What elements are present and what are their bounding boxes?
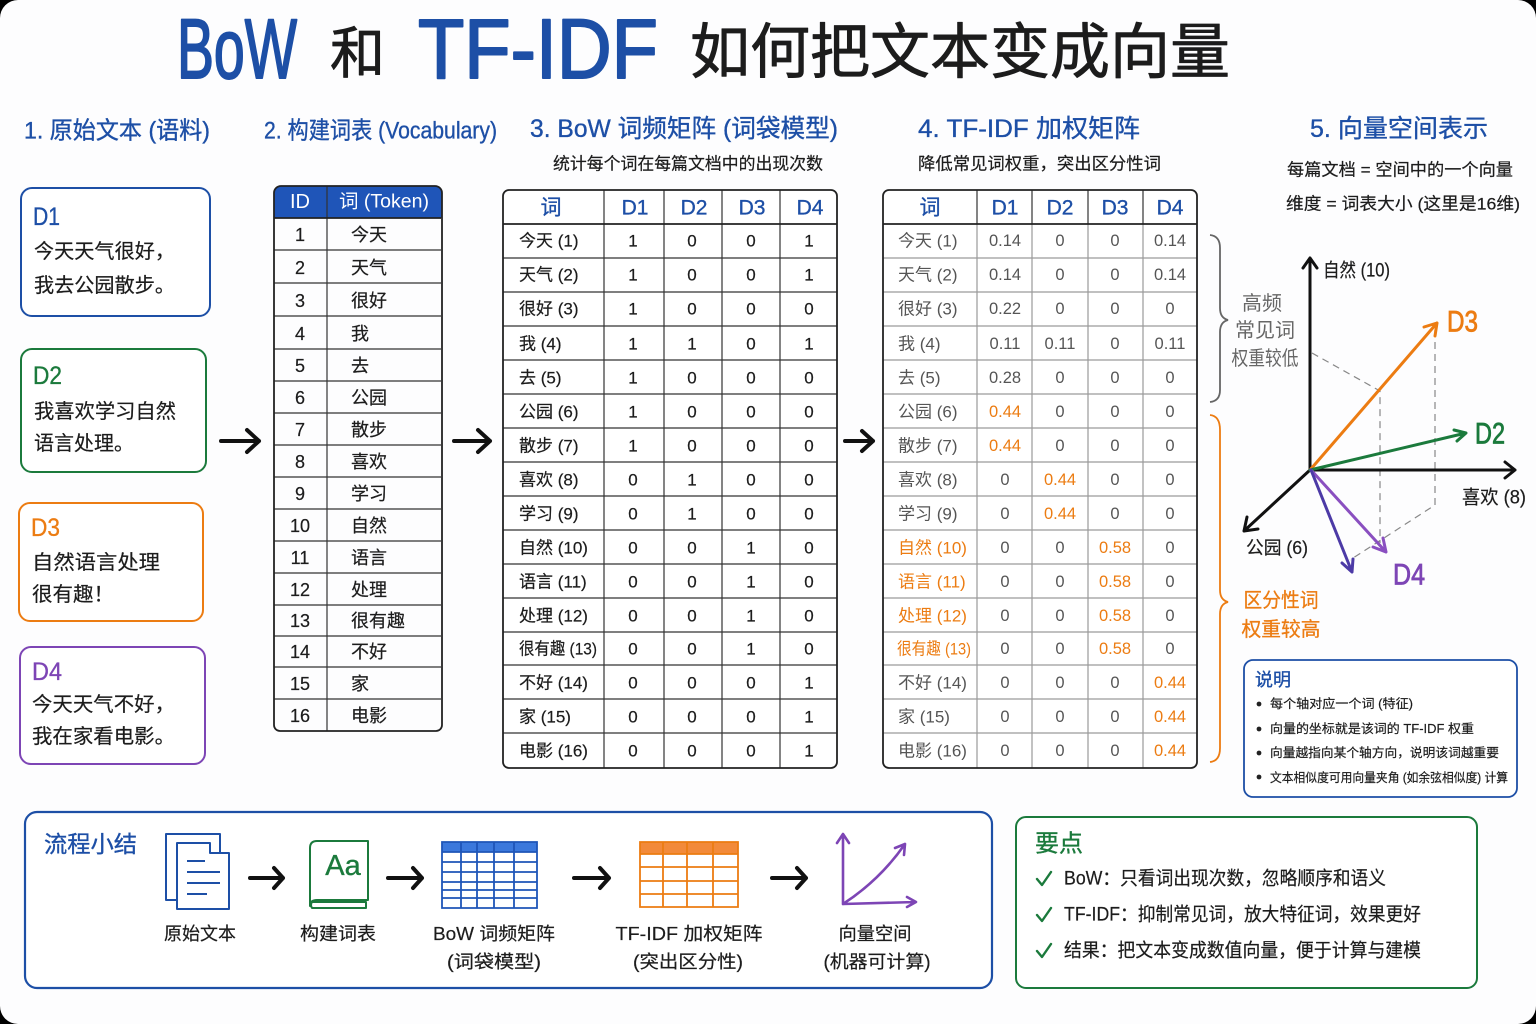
table: vocabulary: 15 bbox=[290, 674, 310, 694]
brace: high-frequency words bbox=[1210, 235, 1298, 402]
table: BoW matrix: 1 bbox=[628, 300, 638, 318]
table: TF-IDF matrix: 我 (4) bbox=[898, 334, 940, 354]
table: TF-IDF matrix: 词 bbox=[920, 196, 940, 220]
table: TF-IDF matrix: 0.44 bbox=[989, 403, 1021, 421]
table: vocabulary: 我 bbox=[351, 324, 369, 344]
table: TF-IDF matrix: 电影 (16) bbox=[898, 742, 967, 760]
document D4: D4 bbox=[32, 658, 62, 686]
table: TF-IDF matrix: 学习 (9) bbox=[898, 504, 958, 524]
table: BoW matrix: 0 bbox=[804, 606, 814, 626]
table: TF-IDF matrix: D2 bbox=[1047, 196, 1073, 220]
table: TF-IDF matrix: 0.58 bbox=[1099, 640, 1131, 658]
table: TF-IDF matrix: 0 bbox=[1110, 300, 1120, 318]
table: TF-IDF matrix: 0 bbox=[1165, 505, 1175, 523]
label: TF-IDF matrix: (突出区分性) bbox=[633, 952, 743, 972]
table: TF-IDF matrix: 0 bbox=[1165, 369, 1175, 387]
vector D4 bbox=[1311, 470, 1386, 552]
table: BoW matrix: 自然 (10) bbox=[519, 538, 588, 558]
chart: vector space bbox=[1244, 258, 1526, 592]
axis: like bbox=[1310, 462, 1515, 478]
table: vocabulary: 不好 bbox=[351, 642, 387, 662]
table: BoW matrix: 1 bbox=[628, 334, 638, 354]
table: BoW matrix: 0 bbox=[628, 572, 638, 592]
table: BoW matrix: 0 bbox=[687, 436, 697, 456]
table: BoW matrix: 0 bbox=[628, 606, 638, 626]
table: BoW matrix: 0 bbox=[687, 640, 697, 658]
table: TF-IDF matrix: 不好 (14) bbox=[898, 674, 967, 692]
table: TF-IDF matrix: 0 bbox=[1000, 742, 1010, 760]
table: vocabulary: 散步 bbox=[351, 420, 387, 440]
table: TF-IDF matrix: 家 (15) bbox=[898, 708, 950, 726]
table: TF-IDF matrix: 0.11 bbox=[990, 335, 1020, 353]
table: BoW matrix: D3 bbox=[739, 196, 765, 220]
table: TF-IDF matrix: 0 bbox=[1110, 674, 1120, 692]
table: BoW matrix: 1 bbox=[628, 368, 638, 388]
table: vocabulary: 喜欢 bbox=[351, 452, 387, 472]
table: TF-IDF matrix: 0 bbox=[1165, 607, 1175, 625]
table: vocabulary: 6 bbox=[295, 388, 305, 408]
table: vocabulary: 今天 bbox=[351, 225, 387, 245]
panel: key points: TF-IDF：抑制常见词，放大特征词，效果更好 bbox=[1064, 904, 1421, 926]
table: BoW matrix: 喜欢 (8) bbox=[519, 470, 578, 490]
chart: vector space: D2 bbox=[1475, 418, 1505, 450]
document D1 bbox=[21, 188, 210, 316]
table: TF-IDF matrix: 0.44 bbox=[1044, 471, 1076, 489]
table: BoW matrix: 0 bbox=[746, 300, 756, 318]
table: BoW matrix: 0 bbox=[746, 742, 756, 760]
axis: natural bbox=[1303, 258, 1317, 470]
table: BoW matrix: D1 bbox=[622, 196, 648, 220]
table: vocabulary: 16 bbox=[290, 706, 310, 726]
icon: vectors bbox=[837, 834, 916, 907]
table: TF-IDF matrix: 0.58 bbox=[1099, 539, 1131, 557]
table: vocabulary: ID bbox=[290, 191, 310, 213]
table: TF-IDF matrix: 0 bbox=[1165, 403, 1175, 421]
table: BoW matrix: 1 bbox=[804, 674, 814, 692]
brace: distinctive words: 权重较高 bbox=[1242, 618, 1320, 641]
table: BoW matrix: 1 bbox=[804, 708, 814, 726]
table: BoW matrix: 0 bbox=[746, 504, 756, 524]
table: BoW matrix: 0 bbox=[687, 368, 697, 388]
table: vocabulary: 词 (Token) bbox=[339, 190, 429, 212]
table: TF-IDF matrix: 0 bbox=[1000, 674, 1010, 692]
table: TF-IDF matrix: 今天 (1) bbox=[898, 232, 958, 250]
table: vocabulary: 公园 bbox=[351, 388, 387, 408]
table: BoW matrix: 天气 (2) bbox=[519, 266, 578, 284]
title bbox=[177, 2, 1230, 96]
table: vocabulary bbox=[274, 186, 442, 731]
subtitle: step 5: 每篇文档 = 空间中的一个向量 bbox=[1287, 160, 1513, 180]
icon: documents bbox=[166, 834, 229, 909]
table: BoW matrix: 0 bbox=[804, 368, 814, 388]
table: vocabulary: 9 bbox=[295, 484, 305, 504]
table: BoW matrix: 1 bbox=[804, 742, 814, 760]
table: vocabulary: 4 bbox=[295, 324, 305, 344]
arrow: documents to vocabulary bbox=[221, 430, 259, 452]
table: TF-IDF matrix bbox=[883, 190, 1197, 768]
table: TF-IDF matrix: 0 bbox=[1055, 640, 1065, 658]
table: BoW matrix: 1 bbox=[804, 232, 814, 250]
label: raw text: 原始文本 bbox=[164, 924, 236, 944]
table: TF-IDF matrix: 0 bbox=[1110, 335, 1120, 353]
table: TF-IDF matrix: 0 bbox=[1110, 232, 1120, 250]
document D3: 自然语言处理 bbox=[32, 551, 160, 574]
document D4: 今天天气不好， bbox=[32, 693, 175, 716]
table: vocabulary: 7 bbox=[295, 420, 305, 440]
panel: process summary bbox=[25, 812, 992, 988]
table: TF-IDF matrix: 0.22 bbox=[989, 300, 1021, 318]
document D2 bbox=[21, 349, 206, 472]
table: BoW matrix: 1 bbox=[746, 640, 756, 658]
table: BoW matrix: 今天 (1) bbox=[519, 232, 578, 250]
table: BoW matrix: 我 (4) bbox=[519, 334, 562, 354]
table: vocabulary: 1 bbox=[295, 225, 305, 245]
table: vocabulary: 自然 bbox=[351, 516, 387, 536]
table: BoW matrix: 去 (5) bbox=[519, 368, 562, 388]
chart: vector space: D4 bbox=[1393, 558, 1425, 592]
label: TF-IDF matrix: TF-IDF 加权矩阵 bbox=[616, 924, 762, 944]
table: vocabulary: 语言 bbox=[351, 548, 387, 568]
table: vocabulary: 天气 bbox=[351, 258, 387, 278]
panel: notes bbox=[1244, 660, 1517, 797]
title: TF-IDF bbox=[418, 2, 658, 96]
table: BoW matrix: 很好 (3) bbox=[519, 300, 578, 318]
table: TF-IDF matrix: 0.44 bbox=[1154, 742, 1186, 760]
table: BoW matrix: 1 bbox=[687, 470, 697, 490]
subtitle: step 5: 维度 = 词表大小 (这里是16维) bbox=[1286, 194, 1520, 214]
panel: key points: 结果：把文本变成数值向量，便于计算与建模 bbox=[1064, 940, 1421, 962]
table: BoW matrix: 0 bbox=[687, 538, 697, 558]
table: TF-IDF matrix: 0 bbox=[1055, 674, 1065, 692]
table: TF-IDF matrix: 0 bbox=[1055, 403, 1065, 421]
heading: step 4: 4. TF-IDF 加权矩阵 bbox=[918, 115, 1140, 143]
table: BoW matrix: D2 bbox=[681, 196, 707, 220]
table: BoW matrix: 1 bbox=[746, 572, 756, 592]
table: TF-IDF matrix: 0 bbox=[1055, 369, 1065, 387]
label: vector space bbox=[824, 924, 930, 972]
axis: park bbox=[1244, 470, 1310, 531]
table: TF-IDF matrix: 0.58 bbox=[1099, 607, 1131, 625]
table: BoW matrix: 处理 (12) bbox=[519, 606, 588, 626]
table: BoW matrix: 0 bbox=[628, 640, 638, 658]
table: BoW matrix: 1 bbox=[628, 266, 638, 284]
table: TF-IDF matrix: 0.14 bbox=[1154, 232, 1186, 250]
table: TF-IDF matrix: 0.11 bbox=[1155, 335, 1185, 353]
table: vocabulary: 8 bbox=[295, 452, 305, 472]
table: BoW matrix: 0 bbox=[628, 742, 638, 760]
document D2: 语言处理。 bbox=[34, 432, 134, 455]
table: TF-IDF matrix: 0.14 bbox=[1154, 266, 1186, 284]
table: vocabulary: 5 bbox=[295, 356, 305, 376]
table: TF-IDF matrix: 0 bbox=[1165, 300, 1175, 318]
table: vocabulary: 电影 bbox=[351, 706, 387, 726]
table: BoW matrix: 0 bbox=[804, 300, 814, 318]
table: TF-IDF matrix: D3 bbox=[1102, 196, 1128, 220]
panel: notes: 向量的坐标就是该词的 TF-IDF 权重 bbox=[1270, 721, 1474, 736]
panel: notes: 向量越指向某个轴方向，说明该词越重要 bbox=[1270, 745, 1499, 760]
document D1: 我去公园散步。 bbox=[34, 274, 175, 297]
document D4 bbox=[20, 647, 205, 764]
table: BoW matrix: 0 bbox=[746, 436, 756, 456]
table: vocabulary: 很有趣 bbox=[351, 611, 405, 631]
table: TF-IDF matrix: 0 bbox=[1110, 505, 1120, 523]
table: vocabulary: 很好 bbox=[351, 291, 387, 311]
table: TF-IDF matrix: 去 (5) bbox=[898, 368, 940, 388]
table: vocabulary: 10 bbox=[290, 516, 310, 536]
table: TF-IDF matrix: 0 bbox=[1055, 573, 1065, 591]
table: BoW matrix: 1 bbox=[746, 538, 756, 558]
table: TF-IDF matrix: 散步 (7) bbox=[898, 436, 958, 456]
table: TF-IDF matrix: 0.44 bbox=[1154, 708, 1186, 726]
brace: high-frequency words: 高频 bbox=[1242, 292, 1282, 315]
label: BoW matrix: (词袋模型) bbox=[447, 952, 541, 972]
table: TF-IDF matrix: 0.44 bbox=[1154, 674, 1186, 692]
label: TF-IDF matrix bbox=[616, 924, 762, 972]
table: BoW matrix: 0 bbox=[746, 674, 756, 692]
table: BoW matrix: 1 bbox=[687, 334, 697, 354]
table: BoW matrix: 0 bbox=[804, 640, 814, 658]
table: BoW matrix: 很有趣 (13) bbox=[519, 640, 597, 658]
table: BoW matrix: 0 bbox=[804, 504, 814, 524]
icon: book bbox=[310, 841, 368, 908]
chart: vector space: 公园 (6) bbox=[1246, 538, 1308, 558]
table: TF-IDF matrix: 0 bbox=[1055, 437, 1065, 455]
table: TF-IDF matrix: D4 bbox=[1157, 196, 1184, 220]
heading: step 3: 3. BoW 词频矩阵 (词袋模型) bbox=[530, 115, 838, 143]
arrow bbox=[574, 868, 609, 888]
table: BoW matrix: 0 bbox=[687, 572, 697, 592]
chart: vector space: 喜欢 (8) bbox=[1462, 486, 1526, 508]
table: TF-IDF matrix: 0 bbox=[1055, 266, 1065, 284]
table: BoW matrix: 0 bbox=[687, 402, 697, 422]
table: TF-IDF matrix: 0.14 bbox=[989, 232, 1021, 250]
table: BoW matrix: 词 bbox=[540, 196, 562, 220]
table: BoW matrix: 0 bbox=[746, 402, 756, 422]
vector D3 bbox=[1310, 323, 1437, 470]
table: BoW matrix: 0 bbox=[687, 708, 697, 726]
table: TF-IDF matrix: 0 bbox=[1000, 539, 1010, 557]
title: BoW bbox=[177, 2, 297, 96]
table: TF-IDF matrix: D1 bbox=[992, 196, 1018, 220]
table: BoW matrix: 0 bbox=[804, 538, 814, 558]
arrow bbox=[388, 868, 422, 888]
table: TF-IDF matrix: 0 bbox=[1110, 403, 1120, 421]
document D1: D1 bbox=[33, 203, 60, 231]
table: vocabulary: 处理 bbox=[351, 580, 387, 600]
table: TF-IDF matrix: 0 bbox=[1110, 369, 1120, 387]
table: BoW matrix: 学习 (9) bbox=[519, 504, 578, 524]
table: BoW matrix: 0 bbox=[628, 470, 638, 490]
document D2: 我喜欢学习自然 bbox=[34, 400, 176, 423]
panel: documents bbox=[19, 188, 210, 764]
table: TF-IDF matrix: 0 bbox=[1165, 437, 1175, 455]
table: TF-IDF matrix: 语言 (11) bbox=[898, 572, 966, 592]
table: TF-IDF matrix: 0 bbox=[1055, 232, 1065, 250]
table: BoW matrix: 0 bbox=[687, 674, 697, 692]
brace: high-frequency words: 常见词 bbox=[1235, 319, 1295, 342]
table: BoW matrix: 1 bbox=[746, 606, 756, 626]
label: build vocabulary: 构建词表 bbox=[300, 924, 376, 944]
table: TF-IDF matrix: 0 bbox=[1110, 437, 1120, 455]
table: TF-IDF matrix: 0.11 bbox=[1045, 335, 1075, 353]
panel: key points bbox=[1016, 817, 1477, 988]
table: vocabulary: 学习 bbox=[351, 484, 387, 504]
panel: notes: 说明 bbox=[1255, 670, 1291, 690]
label: vector space: 向量空间 bbox=[838, 924, 912, 944]
table: BoW matrix: 不好 (14) bbox=[519, 674, 588, 692]
table: BoW matrix: 0 bbox=[628, 708, 638, 726]
table: TF-IDF matrix: 很好 (3) bbox=[898, 300, 958, 318]
table: BoW matrix: D4 bbox=[797, 196, 824, 220]
table: TF-IDF matrix: 0 bbox=[1000, 607, 1010, 625]
title: 如何把文本变成向量 bbox=[690, 19, 1230, 86]
table: TF-IDF matrix: 0 bbox=[1000, 471, 1010, 489]
table: BoW matrix: 0 bbox=[804, 402, 814, 422]
table: TF-IDF matrix: 天气 (2) bbox=[898, 266, 958, 284]
table: TF-IDF matrix: 0.44 bbox=[989, 437, 1021, 455]
table: BoW matrix: 散步 (7) bbox=[519, 436, 578, 456]
document D4: 我在家看电影。 bbox=[32, 725, 175, 748]
table: vocabulary: 13 bbox=[290, 611, 310, 631]
table: TF-IDF matrix: 0 bbox=[1110, 708, 1120, 726]
table: BoW matrix: 0 bbox=[687, 266, 697, 284]
table: BoW matrix: 0 bbox=[628, 674, 638, 692]
title: 和 bbox=[330, 22, 385, 85]
icon: blue table bbox=[442, 842, 537, 908]
table: BoW matrix bbox=[503, 190, 837, 768]
document D3 bbox=[19, 503, 203, 621]
table: BoW matrix: 家 (15) bbox=[519, 708, 571, 726]
table: BoW matrix: 公园 (6) bbox=[519, 402, 578, 422]
table: TF-IDF matrix: 0 bbox=[1055, 607, 1065, 625]
icon: book: Aa bbox=[325, 850, 362, 882]
table: TF-IDF matrix: 0 bbox=[1165, 573, 1175, 591]
subtitle: step 3: 统计每个词在每篇文档中的出现次数 bbox=[553, 154, 823, 174]
table: vocabulary: 12 bbox=[290, 580, 310, 600]
label: vector space: (机器可计算) bbox=[824, 952, 930, 972]
heading: step 2: 2. 构建词表 (Vocabulary) bbox=[264, 118, 497, 144]
table: vocabulary: 14 bbox=[290, 642, 310, 662]
table: BoW matrix: 0 bbox=[804, 470, 814, 490]
subtitle: step 4: 降低常见词权重，突出区分性词 bbox=[918, 154, 1161, 174]
table: BoW matrix: 电影 (16) bbox=[519, 742, 588, 760]
brace: high-frequency words: 权重较低 bbox=[1232, 347, 1298, 370]
table: vocabulary: 2 bbox=[295, 258, 305, 278]
table: TF-IDF matrix: 0 bbox=[1110, 266, 1120, 284]
table: TF-IDF matrix: 公园 (6) bbox=[898, 402, 958, 422]
table: BoW matrix: 0 bbox=[628, 504, 638, 524]
table: TF-IDF matrix: 0 bbox=[1000, 708, 1010, 726]
table: TF-IDF matrix: 自然 (10) bbox=[898, 538, 967, 558]
table: vocabulary: 家 bbox=[351, 674, 369, 694]
table: BoW matrix: 0 bbox=[687, 606, 697, 626]
table: BoW matrix: 0 bbox=[804, 436, 814, 456]
table: BoW matrix: 1 bbox=[804, 334, 814, 354]
table: TF-IDF matrix: 0 bbox=[1055, 742, 1065, 760]
table: TF-IDF matrix: 0 bbox=[1055, 300, 1065, 318]
table: BoW matrix: 1 bbox=[628, 436, 638, 456]
table: vocabulary: 3 bbox=[295, 291, 305, 311]
document D2: D2 bbox=[33, 362, 62, 390]
table: TF-IDF matrix: 0 bbox=[1000, 573, 1010, 591]
table: BoW matrix: 0 bbox=[746, 334, 756, 354]
table: BoW matrix: 1 bbox=[628, 232, 638, 250]
panel: key points: BoW：只看词出现次数，忽略顺序和语义 bbox=[1064, 868, 1386, 890]
table: BoW matrix: 0 bbox=[628, 538, 638, 558]
table: TF-IDF matrix: 0.44 bbox=[1044, 505, 1076, 523]
table: BoW matrix: 0 bbox=[746, 368, 756, 388]
label: BoW matrix: BoW 词频矩阵 bbox=[433, 924, 555, 944]
arrow: BoW to TF-IDF bbox=[845, 431, 873, 451]
table: BoW matrix: 1 bbox=[628, 402, 638, 422]
vector D2 bbox=[1310, 430, 1466, 470]
table: TF-IDF matrix: 0 bbox=[1110, 471, 1120, 489]
table: TF-IDF matrix: 0.58 bbox=[1099, 573, 1131, 591]
table: BoW matrix: 0 bbox=[746, 470, 756, 490]
heading: step 5: 5. 向量空间表示 bbox=[1310, 115, 1488, 143]
panel: notes: 文本相似度可用向量夹角 (如余弦相似度) 计算 bbox=[1270, 770, 1508, 785]
table: BoW matrix: 0 bbox=[746, 708, 756, 726]
table: TF-IDF matrix: 喜欢 (8) bbox=[898, 470, 958, 490]
panel: key points: 要点 bbox=[1035, 830, 1083, 858]
document D3: D3 bbox=[31, 514, 60, 542]
arrow bbox=[250, 868, 283, 888]
table: TF-IDF matrix: 处理 (12) bbox=[898, 606, 967, 626]
table: BoW matrix: 1 bbox=[687, 504, 697, 524]
table: TF-IDF matrix: 0 bbox=[1000, 505, 1010, 523]
table: TF-IDF matrix: 0 bbox=[1055, 708, 1065, 726]
table: BoW matrix: 1 bbox=[804, 266, 814, 284]
table: TF-IDF matrix: 0.28 bbox=[989, 369, 1021, 387]
arrow: vocabulary to BoW bbox=[454, 430, 490, 452]
heading: step 1: 1. 原始文本 (语料) bbox=[24, 118, 210, 144]
table: TF-IDF matrix: 0 bbox=[1165, 539, 1175, 557]
table: BoW matrix: 语言 (11) bbox=[519, 572, 587, 592]
table: TF-IDF matrix: 0 bbox=[1110, 742, 1120, 760]
table: TF-IDF matrix: 0.14 bbox=[989, 266, 1021, 284]
table: BoW matrix: 0 bbox=[746, 232, 756, 250]
table: TF-IDF matrix: 0 bbox=[1055, 539, 1065, 557]
icon: orange table bbox=[640, 842, 738, 907]
panel: notes: 每个轴对应一个词 (特征) bbox=[1270, 696, 1413, 711]
table: TF-IDF matrix: 0 bbox=[1165, 640, 1175, 658]
table: BoW matrix: 0 bbox=[687, 742, 697, 760]
subtitle: step 5 bbox=[1286, 160, 1520, 214]
brace: distinctive words: 区分性词 bbox=[1244, 589, 1318, 612]
table: vocabulary: 去 bbox=[351, 356, 369, 376]
vector D4 second bbox=[1311, 470, 1353, 572]
table: BoW matrix: 0 bbox=[746, 266, 756, 284]
panel: process summary: 流程小结 bbox=[44, 831, 137, 857]
table: BoW matrix: 0 bbox=[687, 300, 697, 318]
label: BoW matrix bbox=[433, 924, 555, 972]
document D1: 今天天气很好， bbox=[34, 240, 175, 263]
table: TF-IDF matrix: 0 bbox=[1000, 640, 1010, 658]
chart: vector space: D3 bbox=[1447, 306, 1478, 338]
table: vocabulary: 11 bbox=[291, 548, 309, 568]
arrow bbox=[772, 868, 806, 888]
brace: distinctive words bbox=[1210, 415, 1320, 762]
document D3: 很有趣！ bbox=[32, 583, 114, 606]
table: TF-IDF matrix: 很有趣 (13) bbox=[897, 640, 971, 658]
table: TF-IDF matrix: 0 bbox=[1165, 471, 1175, 489]
table: BoW matrix: 0 bbox=[804, 572, 814, 592]
table: BoW matrix: 0 bbox=[687, 232, 697, 250]
chart: vector space: 自然 (10) bbox=[1323, 260, 1390, 282]
